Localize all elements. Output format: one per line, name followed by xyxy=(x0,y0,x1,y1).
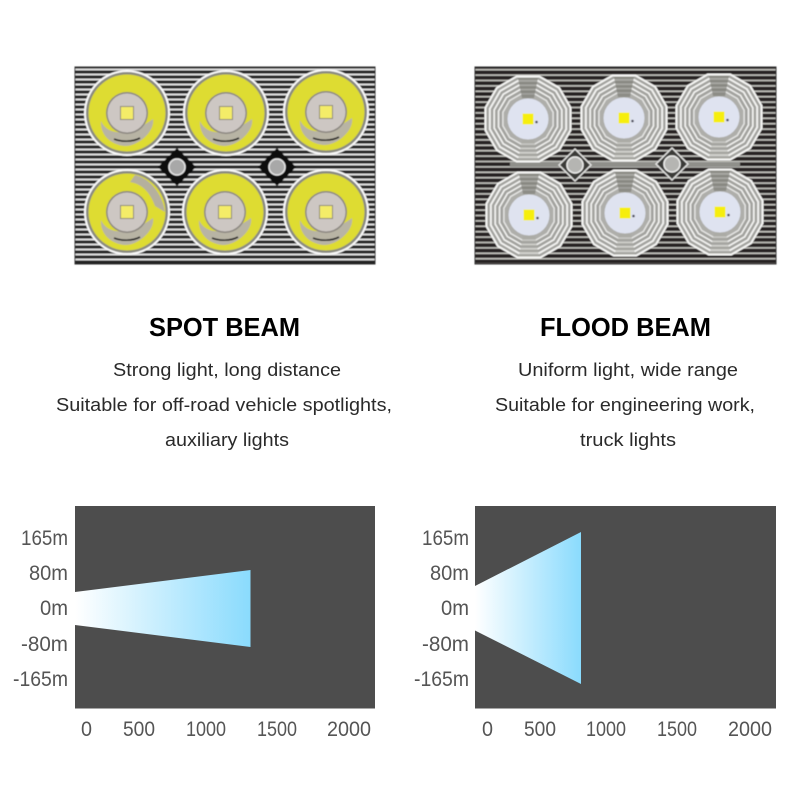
lens: top middle xyxy=(581,75,667,161)
text block: flood beam description: Suitable for engineering work, xyxy=(495,395,755,415)
heading: spot beam: SPOT BEAM xyxy=(149,312,300,342)
chart: spot beam distance xyxy=(13,506,375,741)
lens: top right xyxy=(676,74,762,160)
text block: spot beam description: Suitable for off-road vehicle spotlights, xyxy=(56,395,392,415)
panel: spot beam xyxy=(13,67,392,741)
panel: flood beam xyxy=(414,67,776,741)
x axis labels: 0 xyxy=(482,718,493,741)
beam shape xyxy=(475,532,581,684)
y axis labels: 0m xyxy=(441,597,469,620)
x axis labels: 1500 xyxy=(257,718,297,741)
heading: flood beam: FLOOD BEAM xyxy=(540,312,711,342)
y axis labels: 165m xyxy=(21,527,68,550)
icon: left diamond LED xyxy=(559,149,591,181)
lens: bottom middle xyxy=(183,170,267,254)
x axis labels: 500 xyxy=(524,718,556,741)
y axis labels: -80m xyxy=(422,633,469,656)
y axis labels: 0m xyxy=(40,597,68,620)
lens: bottom right xyxy=(677,169,763,255)
text block: flood beam description: truck lights xyxy=(580,430,676,450)
y axis labels xyxy=(414,527,469,691)
text block: flood beam description: Uniform light, wide range xyxy=(518,360,738,380)
text block: spot beam description: auxiliary lights xyxy=(165,430,289,450)
icon: left diamond LED xyxy=(158,148,196,186)
text block: spot beam description xyxy=(56,360,392,450)
centre metal band xyxy=(510,162,740,167)
y axis labels: -165m xyxy=(414,668,469,691)
chart: flood beam distance xyxy=(414,506,776,741)
lens wear: bottom left xyxy=(130,175,165,212)
x axis labels: 2000 xyxy=(327,718,371,741)
lens: bottom left xyxy=(85,170,169,254)
lens: top right xyxy=(284,70,368,154)
text block: spot beam description: Strong light, long distance xyxy=(113,360,341,380)
x axis labels: 2000 xyxy=(728,718,772,741)
icon: right diamond LED xyxy=(656,148,688,180)
lens: top left xyxy=(485,76,571,162)
lens: bottom left xyxy=(486,172,572,258)
x axis labels: 1500 xyxy=(657,718,697,741)
x axis labels: 0 xyxy=(81,718,92,741)
y axis labels: 80m xyxy=(29,562,68,585)
y axis labels: -80m xyxy=(21,633,68,656)
lens: bottom middle xyxy=(582,170,668,256)
beam shape xyxy=(75,570,250,647)
text block: flood beam description xyxy=(495,360,755,450)
photo: spot beam LED light bar xyxy=(75,67,375,264)
x axis labels: 1000 xyxy=(586,718,626,741)
lens: top left xyxy=(85,71,169,155)
y axis labels xyxy=(13,527,68,691)
lens: bottom right xyxy=(284,170,368,254)
x axis labels: 500 xyxy=(123,718,155,741)
lens: top middle xyxy=(184,71,268,155)
x axis labels xyxy=(482,718,772,741)
y axis labels: 80m xyxy=(430,562,469,585)
x axis labels: 1000 xyxy=(186,718,226,741)
y axis labels: -165m xyxy=(13,668,68,691)
y axis labels: 165m xyxy=(422,527,469,550)
x axis labels xyxy=(81,718,371,741)
icon: right diamond LED xyxy=(258,148,296,186)
photo: flood beam LED light bar xyxy=(475,67,776,264)
